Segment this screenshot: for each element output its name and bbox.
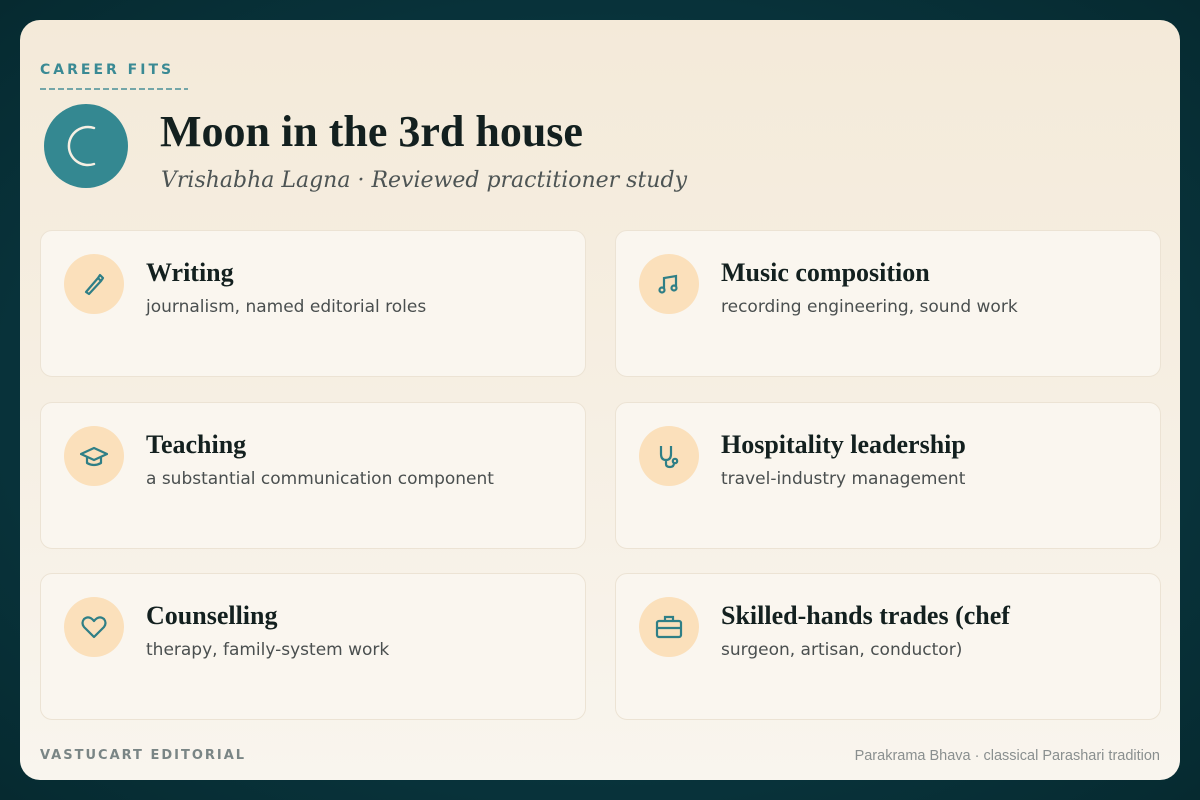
card: writing: journalism, named editorial roles (146, 297, 426, 317)
icon: stethoscope (639, 426, 699, 486)
kicker: career fits: CAREER FITS (40, 62, 174, 78)
subtitle: Vrishabha Lagna · Reviewed practitioner study (161, 168, 687, 193)
card: teaching (40, 402, 586, 549)
card: hospitality (615, 402, 1161, 549)
card: hospitality: Hospitality leadership (721, 430, 966, 459)
icon: music note (639, 254, 699, 314)
card: music: Music composition (721, 258, 930, 287)
card: music (615, 230, 1161, 377)
card: writing: Writing (146, 258, 234, 287)
card: writing (40, 230, 586, 377)
card: hospitality: travel-industry management (721, 469, 965, 489)
icon: graduation cap (64, 426, 124, 486)
card: skilled trades: Skilled-hands trades (chef (721, 601, 1010, 630)
title: Moon in the 3rd house (160, 107, 583, 156)
footer: source note: Parakrama Bhava · classical Parashari tradition (855, 748, 1160, 764)
card: counselling: Counselling (146, 601, 278, 630)
card: counselling (40, 573, 586, 720)
card: teaching: Teaching (146, 430, 246, 459)
card: music: recording engineering, sound work (721, 297, 1018, 317)
card: skilled trades (615, 573, 1161, 720)
icon: heart (64, 597, 124, 657)
card: skilled trades: surgeon, artisan, conductor) (721, 640, 962, 660)
card: teaching: a substantial communication component (146, 469, 494, 489)
footer: brand: VASTUCART EDITORIAL (40, 748, 246, 763)
card: counselling: therapy, family-system work (146, 640, 389, 660)
icon: pen (64, 254, 124, 314)
icon: moon badge (44, 104, 128, 188)
icon: briefcase (639, 597, 699, 657)
